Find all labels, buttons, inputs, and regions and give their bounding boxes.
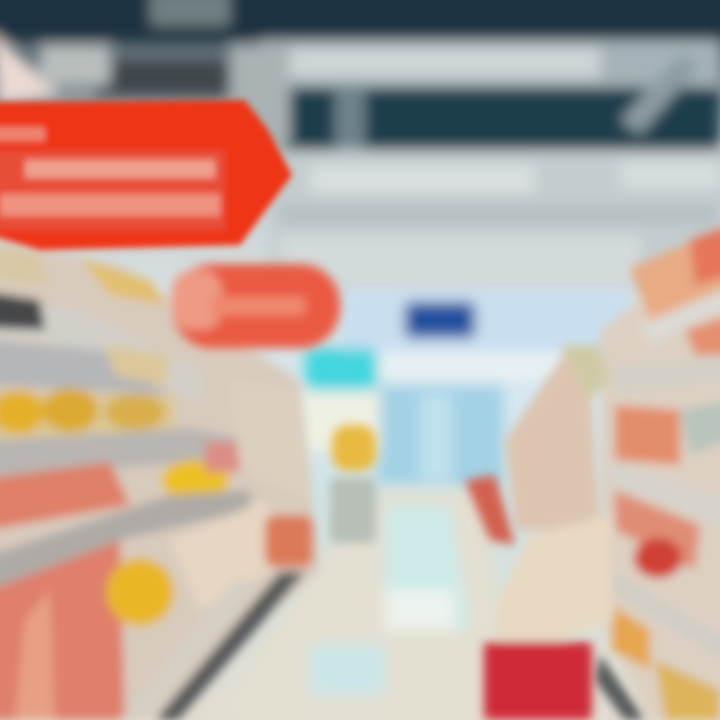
- right shelves: [595, 225, 720, 720]
- shopper with basket: [465, 345, 612, 720]
- shopping cart in distance: [330, 425, 376, 543]
- ceiling: [0, 0, 720, 290]
- floor: [215, 490, 500, 720]
- left shelves: [0, 240, 320, 720]
- red sale sign with blurred lettering: [0, 100, 292, 250]
- back wall and doorway: [300, 290, 630, 485]
- small red sale badge: [172, 264, 340, 348]
